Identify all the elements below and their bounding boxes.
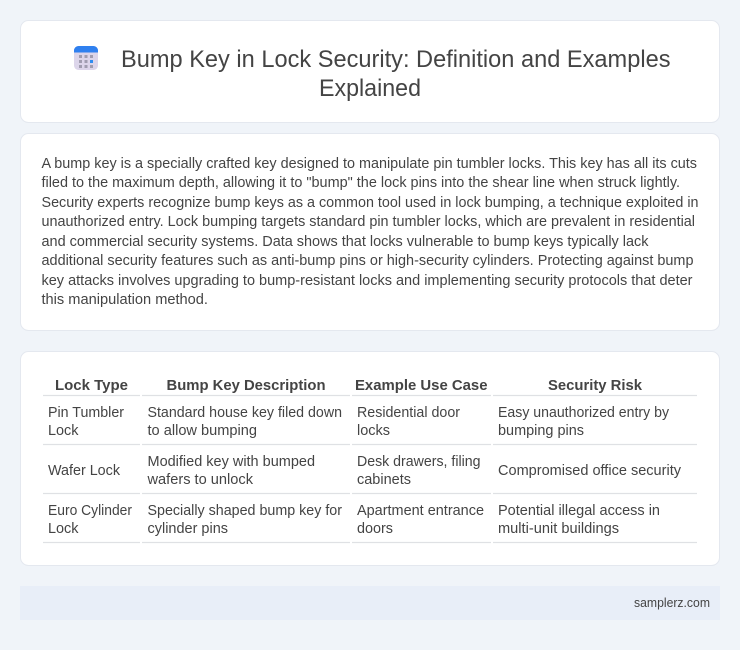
table row: wafer lock: Desk drawers, filing [357,454,480,470]
table row: euro cylinder lock: doors [357,521,393,537]
text block: definition: Security experts recognize bump keys as a common tool used in lock bumping, a technique exploited in [42,195,698,211]
text block: definition: this manipulation method. [42,292,208,308]
table header: Lock Type [55,377,128,394]
table row: pin tumbler lock: Lock [48,423,79,439]
table row: pin tumbler lock: to allow bumping [148,423,257,439]
table row: euro cylinder lock [48,503,660,537]
title: Explained [319,75,421,102]
table header: Bump Key Description [166,377,326,394]
table row: euro cylinder lock: Euro Cylinder [48,503,132,519]
table row: euro cylinder lock: multi-unit buildings [498,521,619,537]
table row: pin tumbler lock: Easy unauthorized entry by [498,405,670,421]
table row: wafer lock: wafers to unlock [147,472,254,488]
table row: wafer lock: Compromised office security [498,463,682,479]
icon: calendar [74,46,98,70]
table row: euro cylinder lock: Potential illegal access in [498,503,660,519]
table header: Example Use Case [355,377,488,394]
table row: wafer lock: Wafer Lock [48,463,121,479]
text block: definition [42,156,698,308]
text block: definition: additional security features such as anti-bump pins or high-security cylinders. Protecting against bump [42,253,694,269]
table header: Security Risk [548,377,643,394]
table header [55,377,643,394]
text block: definition: key attacks involves upgrading to bump-resistant locks and implementing security protocols that deter [42,273,693,289]
table row: pin tumbler lock: Standard house key filed down [148,405,342,421]
table row: euro cylinder lock: Lock [48,521,79,537]
panel: definition paragraph [20,134,720,330]
table row: wafer lock: cabinets [357,472,411,488]
panel: table [20,352,720,566]
table row: pin tumbler lock: Pin Tumbler [48,405,124,421]
title: Bump Key in Lock Security: Definition and Examples [121,46,670,73]
table row: euro cylinder lock: cylinder pins [148,521,228,537]
header panel [20,20,720,122]
table row: pin tumbler lock: bumping pins [498,423,584,439]
table row: wafer lock [48,454,682,488]
text block: definition: and commercial security systems. Data shows that locks vulnerable to bump keys typically lack [42,234,649,250]
footer [20,586,720,620]
table row: wafer lock: Modified key with bumped [148,454,315,470]
text block: definition: filed to the maximum depth, allowing it to "bump" the lock pins into the shear line when struck lightly. [42,175,680,191]
text block: definition: unauthorized entry. Lock bumping targets standard pin tumbler locks, which are prevalent in residential [42,214,695,230]
table row: pin tumbler lock [48,405,670,439]
table row: pin tumbler lock: Residential door [357,405,460,421]
table row: euro cylinder lock: Apartment entrance [357,503,484,519]
footer: samplerz.com [634,596,710,610]
title [121,46,670,102]
text block: definition: A bump key is a specially crafted key designed to manipulate pin tumbler locks. This key has all its cuts [42,156,697,172]
table row: euro cylinder lock: Specially shaped bump key for [148,503,342,519]
table row: pin tumbler lock: locks [357,423,390,439]
